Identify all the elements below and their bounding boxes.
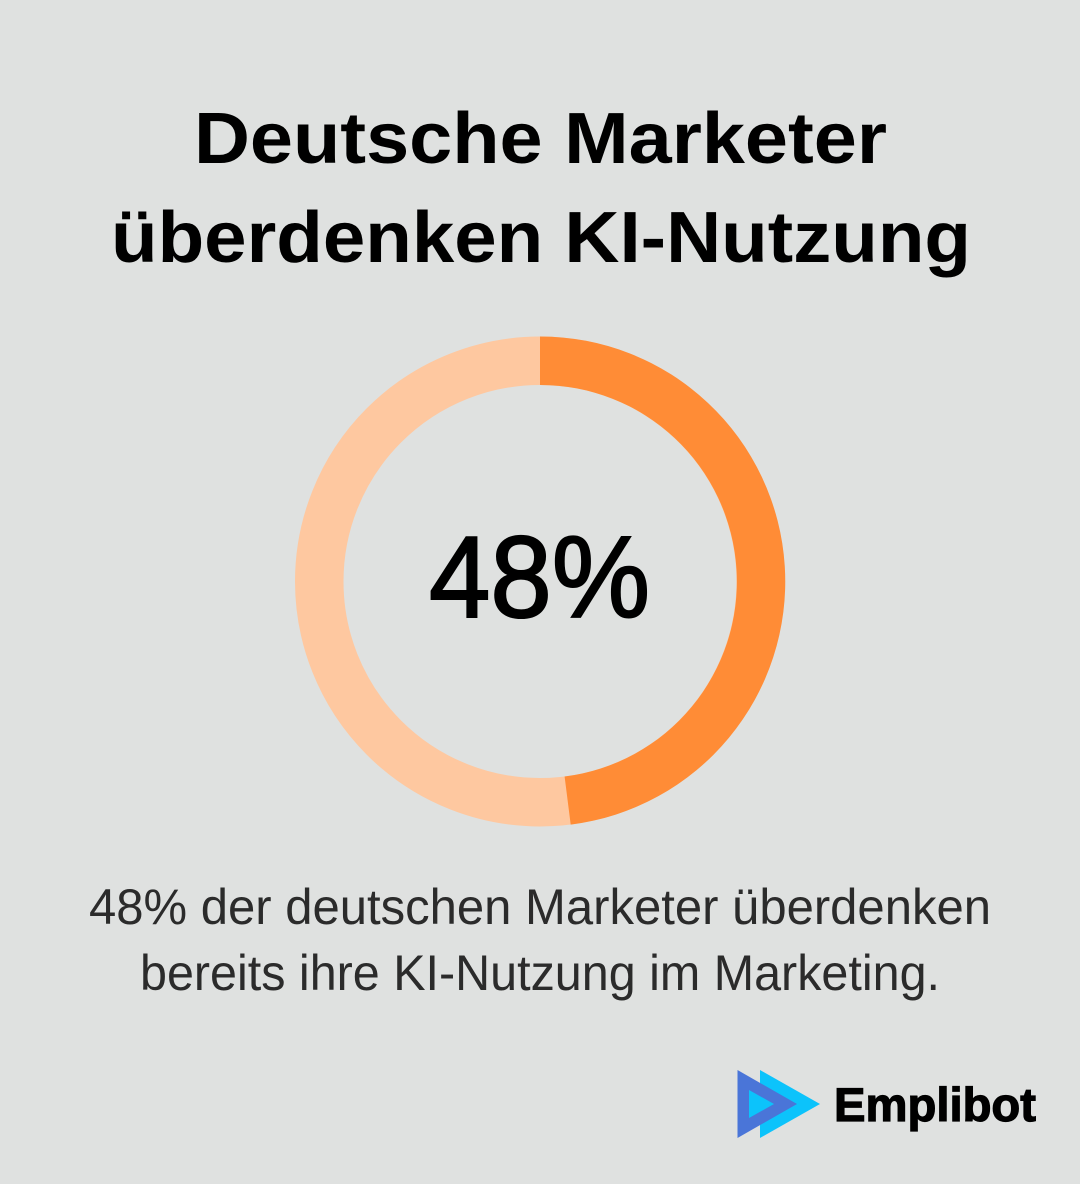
title — [111, 99, 971, 278]
donut chart: 48 percent — [319, 336, 785, 825]
title: Deutsche Marketer — [194, 99, 887, 179]
description text: bereits ihre KI-Nutzung im Marketing. — [140, 945, 940, 1001]
description text: 48% der deutschen Marketer überdenken — [89, 879, 991, 935]
icon: play triangles — [738, 1070, 820, 1138]
logo wordmark: Emplibot — [834, 1078, 1036, 1131]
title: überdenken KI-Nutzung — [111, 198, 971, 278]
description text — [89, 879, 991, 1001]
logo: Emplibot — [738, 1070, 1036, 1138]
center value: 48% — [429, 512, 650, 642]
